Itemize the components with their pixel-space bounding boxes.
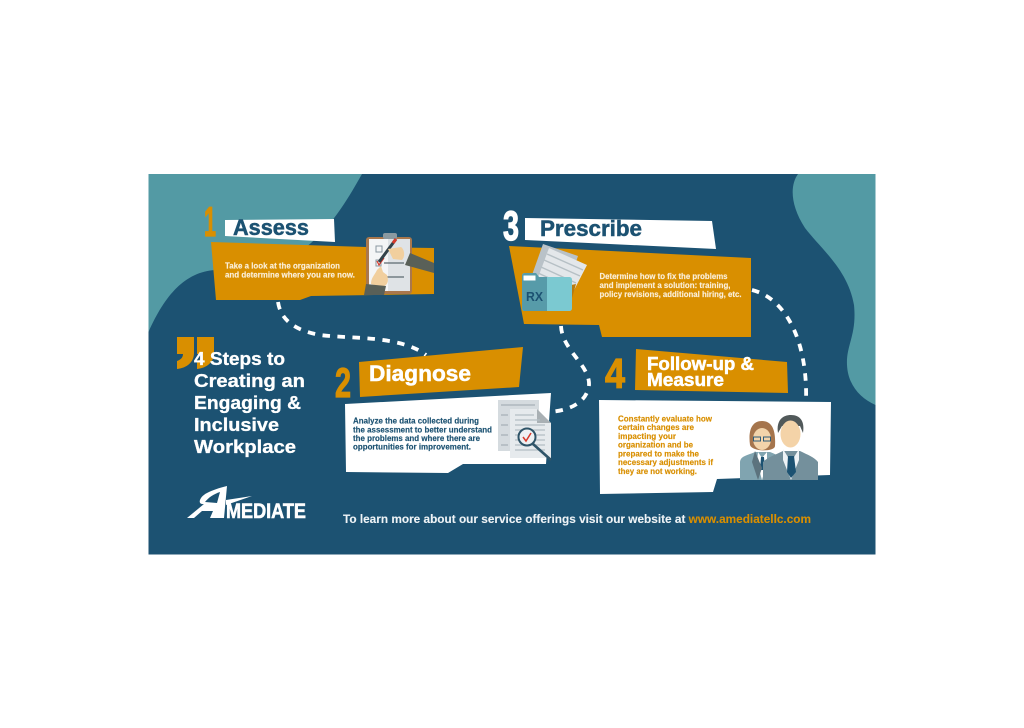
panel: prescribe description — [509, 246, 751, 337]
heading banner: prescribe — [525, 216, 716, 249]
footer call to action: To learn more about our service offerings visit our website at www.amediatellc.com — [343, 514, 811, 526]
title: Engaging & — [194, 393, 301, 413]
title — [194, 349, 305, 457]
infographic panel background — [148, 174, 876, 554]
text block: diagnose description: Analyze the data collected during — [353, 416, 479, 426]
text block: diagnose description — [353, 416, 492, 452]
heading banner: follow-up and measure — [635, 349, 788, 393]
text block: prescribe description — [600, 272, 742, 299]
text block: assess description — [225, 262, 355, 280]
step number 3: 3 — [503, 202, 519, 249]
text block: follow-up description — [618, 414, 713, 476]
step number 1: 1 — [204, 198, 216, 245]
title: 4 Steps to — [194, 349, 285, 369]
text block: prescribe description: policy revisions, additional hiring, etc. — [600, 290, 742, 299]
title: Workplace — [194, 437, 296, 457]
text block: follow-up description: prepared to make the — [618, 450, 700, 458]
heading banner: diagnose — [359, 347, 523, 397]
text block: follow-up description: they are not working. — [618, 467, 697, 476]
text block: follow-up description: impacting your — [618, 432, 676, 441]
panel: follow-up description — [599, 400, 831, 494]
icon: RX folder with papers — [522, 244, 587, 311]
panel: diagnose description — [345, 393, 551, 473]
step 4: follow-up and measure — [599, 349, 831, 494]
icon: woman and man in suits — [740, 415, 818, 480]
icon: documents with magnifying glass — [498, 400, 551, 460]
title: Creating an — [194, 371, 305, 391]
step 1: assess — [204, 198, 434, 300]
heading banner: follow-up and measure: Measure — [647, 370, 724, 390]
heading banner: diagnose: Diagnose — [369, 361, 471, 386]
text block: follow-up description: organization and be — [618, 440, 694, 450]
text block: assess description: Take a look at the organization — [225, 262, 340, 270]
title: Inclusive — [194, 415, 279, 435]
icon: clipboard with hands — [364, 233, 434, 295]
heading banner: assess: Assess — [233, 215, 309, 240]
heading banner: assess — [225, 215, 335, 242]
decorative blob: right teal — [793, 174, 876, 405]
step 2: diagnose — [335, 347, 551, 473]
text block: prescribe description: Determine how to fix the problems — [600, 272, 728, 281]
text block: follow-up description: necessary adjustments if — [618, 458, 713, 467]
heading banner: prescribe: Prescribe — [540, 216, 642, 241]
text block: follow-up description: Constantly evaluate how — [618, 414, 713, 424]
text block: follow-up description: certain changes are — [618, 423, 695, 432]
dashed connector: step 3 to step 2 — [548, 326, 589, 412]
step number 2: 2 — [335, 359, 351, 406]
decorative blob: top-left teal — [148, 174, 362, 332]
dashed connector: step 1 to step 2 — [278, 302, 426, 355]
heading banner: follow-up and measure: Follow-up & — [647, 354, 754, 374]
text block: prescribe description: and implement a solution: training, — [600, 281, 730, 290]
text block: diagnose description: opportunities for improvement. — [353, 442, 471, 452]
quotation mark — [177, 337, 214, 369]
step number 4: 4 — [605, 350, 626, 397]
logo: Amediate — [187, 486, 306, 523]
text block: diagnose description: the problems and where there are — [353, 434, 481, 443]
icon: RX folder with papers: RX — [526, 289, 543, 304]
text block: assess description: and determine where you are now. — [225, 270, 355, 280]
logo: Amediate: MEDIATE — [226, 500, 306, 523]
panel: assess description — [211, 242, 434, 300]
step 3: prescribe — [503, 202, 751, 337]
text block: diagnose description: the assessment to better understand — [353, 426, 492, 434]
dashed connector: step 3 to step 4 — [752, 290, 806, 402]
